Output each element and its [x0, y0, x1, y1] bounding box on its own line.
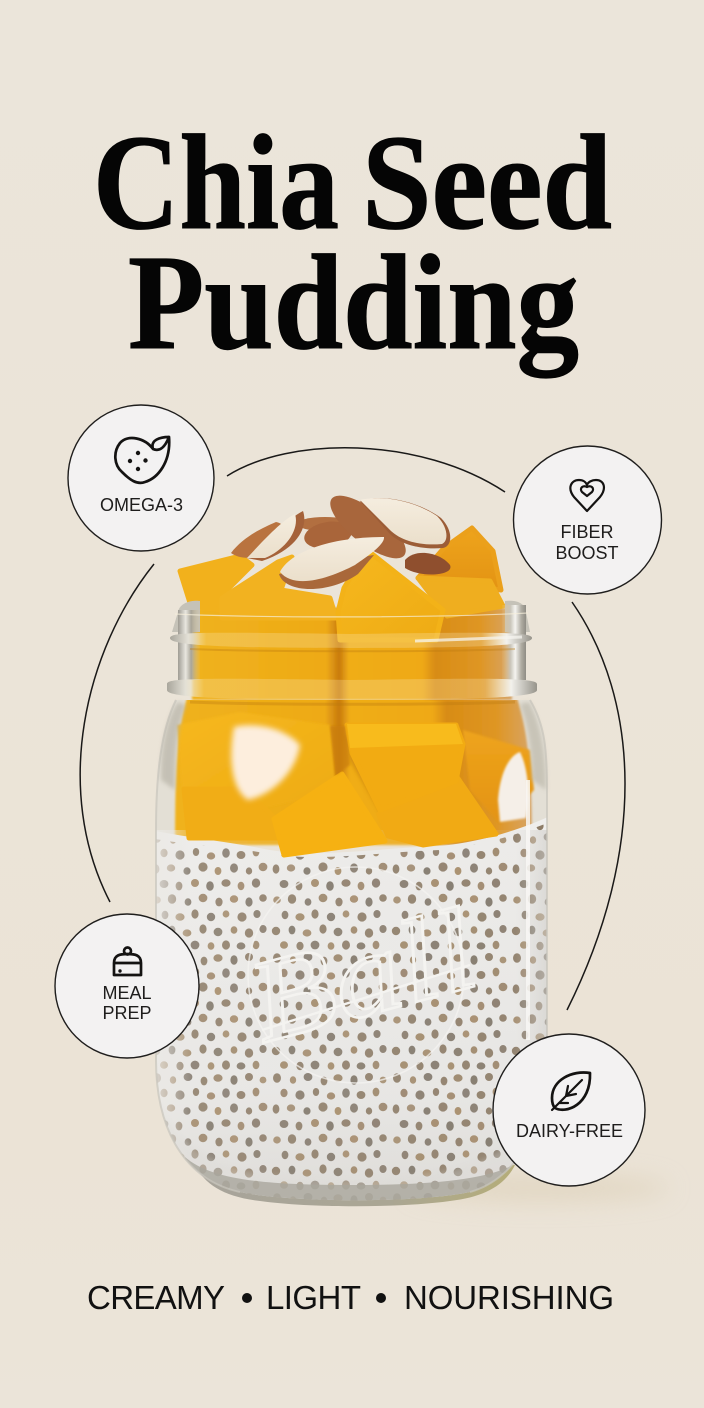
connecting arcs	[80, 448, 625, 1010]
icon: heart	[570, 480, 604, 511]
icon: seed heart with leaf	[115, 437, 169, 483]
icon: leaf	[552, 1072, 590, 1110]
right glass highlight strip	[526, 780, 530, 1040]
title: Seed	[362, 108, 612, 258]
badge: fiber boost: BOOST	[555, 543, 619, 563]
chia pudding layer	[150, 816, 550, 1217]
glass neck sides	[178, 610, 200, 680]
badge: dairy-free	[493, 1034, 645, 1186]
jar shadow	[410, 1174, 670, 1202]
icon: lunch box	[114, 948, 141, 975]
title: Pudding	[128, 228, 579, 378]
badge: meal prep: PREP	[102, 1003, 152, 1023]
lower thread ring	[167, 679, 537, 700]
rim lip	[172, 601, 530, 632]
badge: fiber boost: FIBER	[560, 522, 614, 542]
title	[93, 108, 612, 378]
almond slices	[231, 485, 450, 589]
mango behind glass	[173, 700, 534, 847]
tagline: CREAMY	[87, 1279, 225, 1316]
glass highlights on mango	[231, 725, 528, 822]
embossed jar logo: Ball	[235, 883, 489, 1068]
tagline	[87, 1279, 614, 1316]
mango above rim, seen through glass neck	[180, 528, 512, 700]
badge: fiber boost	[514, 446, 662, 594]
badge: omega-3: OMEGA-3	[100, 495, 183, 515]
jar of chia pudding	[150, 485, 550, 1217]
title: Chia	[93, 108, 339, 258]
tagline: NOURISHING	[404, 1279, 614, 1316]
badge: meal prep: MEAL	[102, 983, 152, 1003]
upper thread ring	[170, 633, 532, 648]
badge: omega-3	[68, 405, 214, 551]
badge: meal prep	[55, 914, 199, 1058]
jar rim and threads	[161, 601, 546, 790]
jar body glass edge	[156, 700, 547, 1192]
badge: dairy-free: DAIRY-FREE	[516, 1121, 623, 1141]
glass jar base	[195, 1165, 515, 1206]
mango cubes in jar	[177, 712, 534, 855]
tagline: LIGHT	[266, 1279, 361, 1316]
